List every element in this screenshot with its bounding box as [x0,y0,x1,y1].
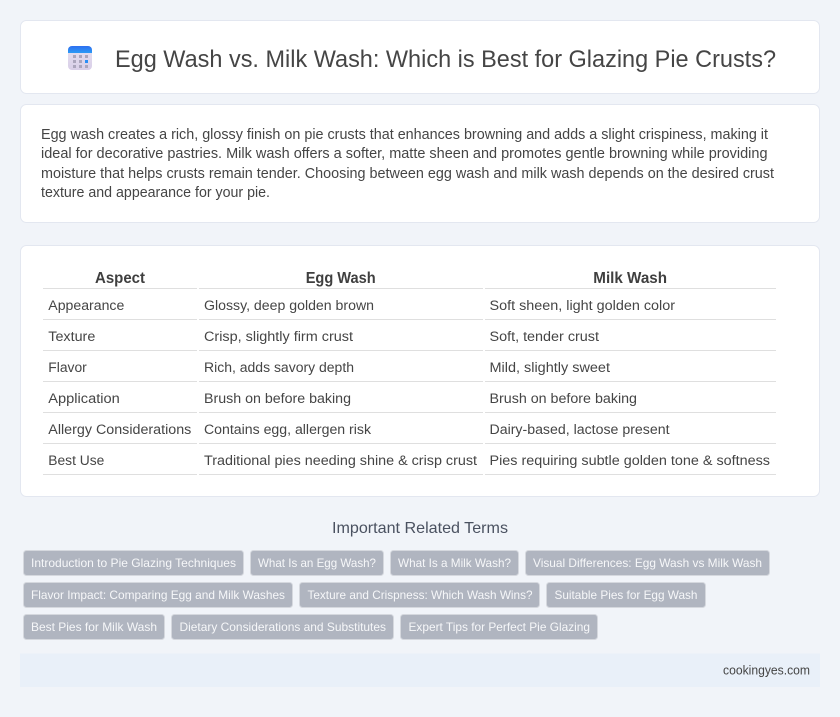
row: flavor: Mild, slightly sweet [490,360,610,376]
row: best use: Traditional pies needing shine & crisp crust [204,453,477,469]
row: application: Brush on before baking [204,391,351,407]
text block: intro paragraph: texture and appearance for your pie. [41,185,270,201]
text block: intro paragraph [41,127,774,201]
tag: Best Pies for Milk Wash [31,620,157,634]
footer [20,654,820,687]
tag: Introduction to Pie Glazing Techniques [31,556,236,570]
table header: Egg Wash [306,270,376,287]
row: allergy considerations: Contains egg, allergen risk [204,422,372,438]
row: texture: Texture [48,329,95,345]
row: appearance: Soft sheen, light golden color [490,298,675,314]
row: best use: Pies requiring subtle golden tone & softness [490,453,770,469]
tag: What Is an Egg Wash? [258,556,376,570]
tag: Texture and Crispness: Which Wash Wins? [308,588,533,602]
tag: Dietary Considerations and Substitutes [180,620,386,634]
row: appearance: Appearance [48,298,124,314]
row: best use [48,453,770,469]
table header: Milk Wash [593,270,667,287]
text block: intro paragraph: Egg wash creates a rich, glossy finish on pie crusts that enhances browning and adds a slight crispiness, making it [41,127,768,143]
heading: important related terms: Important Related Terms [332,520,508,537]
text block: intro paragraph: ideal for decorative pastries. Milk wash offers a softer, matte sheen and promotes gentle browning while providing [41,146,768,162]
tag [400,614,598,640]
tag: Flavor Impact: Comparing Egg and Milk Washes [31,588,285,602]
panel: title header [20,20,820,94]
row: texture [48,329,599,345]
tag [390,550,518,576]
table header [95,270,667,287]
row: application: Application [48,391,120,407]
text block: intro paragraph: moisture that helps crusts remain tender. Choosing between egg wash and milk wash depends on the desired crust [41,166,774,182]
tag [300,582,540,608]
footer source: cookingyes.com [723,664,810,678]
row: application [48,391,637,407]
tag [250,550,384,576]
title: Egg Wash vs. Milk Wash: Which is Best for Glazing Pie Crusts? [115,46,776,73]
row: appearance [48,298,675,314]
tag: What Is a Milk Wash? [398,556,511,570]
row: best use: Best Use [48,453,104,469]
row: application: Brush on before baking [490,391,637,407]
tag [546,582,706,608]
panel: related term tags [24,550,770,640]
panel: comparison table [20,246,820,496]
row: allergy considerations: Dairy-based, lactose present [490,422,670,438]
tag [24,550,244,576]
icon: calendar [68,46,92,70]
tag: Suitable Pies for Egg Wash [554,588,698,602]
tag: Expert Tips for Perfect Pie Glazing [408,620,590,634]
table header: Aspect [95,270,145,287]
tag: Visual Differences: Egg Wash vs Milk Wash [533,556,762,570]
row: appearance: Glossy, deep golden brown [204,298,374,314]
row: texture: Crisp, slightly firm crust [204,329,353,345]
row: texture: Soft, tender crust [490,329,599,345]
tag [172,614,394,640]
tag [24,582,292,608]
row: flavor: Rich, adds savory depth [204,360,354,376]
panel: introduction [20,104,820,222]
row: flavor: Flavor [48,360,87,376]
tag [526,550,770,576]
row: allergy considerations: Allergy Considerations [48,422,191,438]
row: allergy considerations [48,422,670,438]
tag [24,614,164,640]
row: flavor [48,360,610,376]
